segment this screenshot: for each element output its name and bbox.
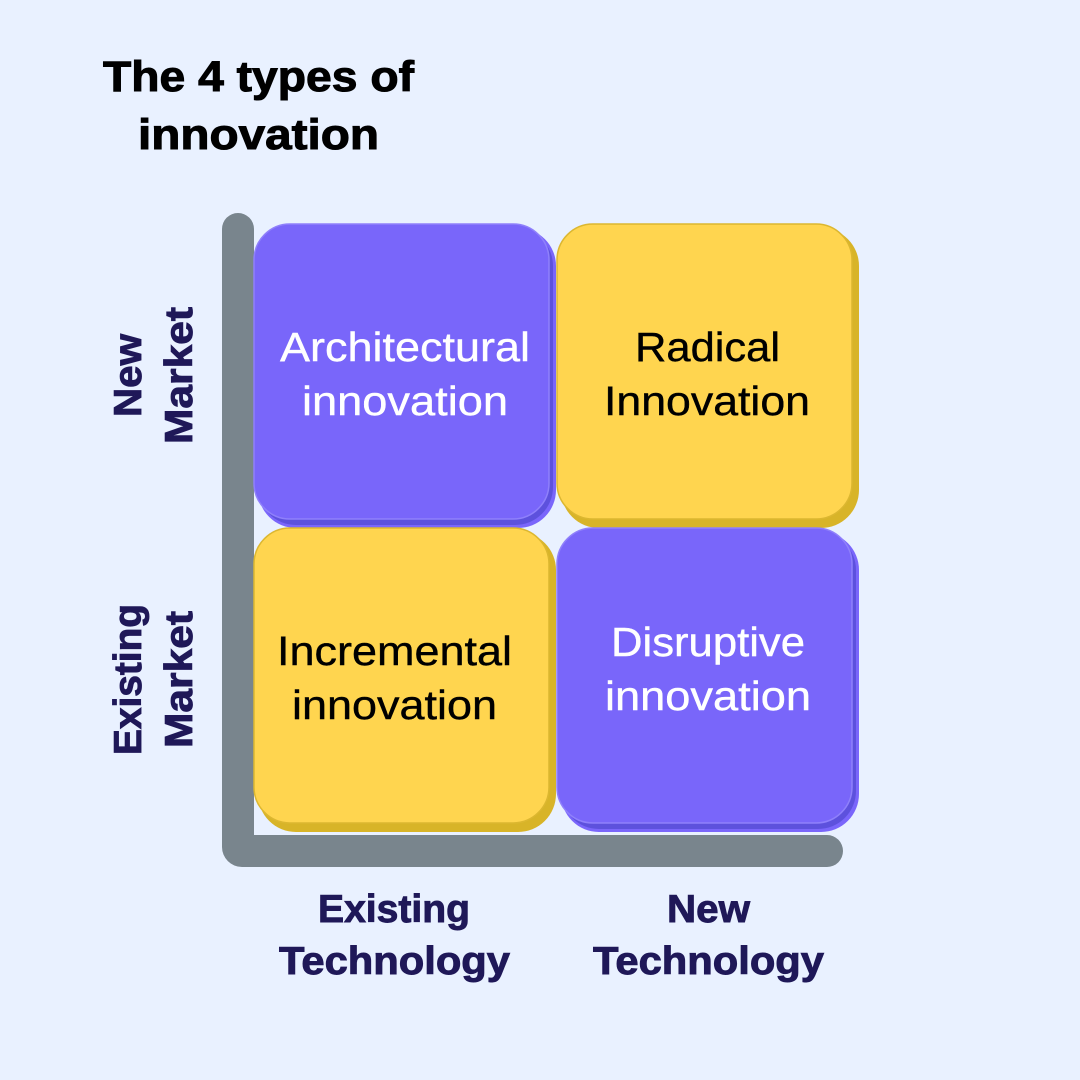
panel: disruptive innovation: innovation [605, 673, 811, 719]
x-axis label: existing technology: Existing [318, 888, 470, 931]
panel: incremental innovation: Incremental [277, 628, 512, 674]
y-axis label: new market [107, 307, 201, 444]
x-axis label: new technology [593, 888, 824, 983]
y-axis label: existing market [107, 604, 201, 755]
y-axis label: existing market: Existing [107, 604, 150, 755]
x-axis label: existing technology [279, 888, 510, 983]
title [103, 53, 415, 159]
title: The 4 types of [103, 53, 415, 101]
panel: disruptive innovation [557, 528, 859, 832]
panel: disruptive innovation: Disruptive [611, 619, 805, 665]
panel: radical innovation: Radical [635, 324, 780, 370]
panel: incremental innovation [254, 528, 556, 832]
x-axis label: existing technology: Technology [279, 940, 510, 983]
panel: architectural innovation: innovation [302, 378, 508, 424]
panel: architectural innovation: Architectural [280, 324, 530, 370]
panel: radical innovation: Innovation [604, 378, 810, 424]
panel: radical innovation [557, 224, 859, 528]
y-axis label: new market: New [107, 333, 150, 417]
x-axis label: new technology: New [667, 888, 751, 931]
x-axis label: new technology: Technology [593, 940, 824, 983]
panel: incremental innovation: innovation [292, 682, 497, 728]
chart axes [222, 213, 843, 867]
panel: architectural innovation [254, 224, 556, 528]
title: innovation [138, 111, 379, 159]
y-axis label: new market: Market [158, 307, 201, 444]
y-axis label: existing market: Market [158, 611, 201, 748]
